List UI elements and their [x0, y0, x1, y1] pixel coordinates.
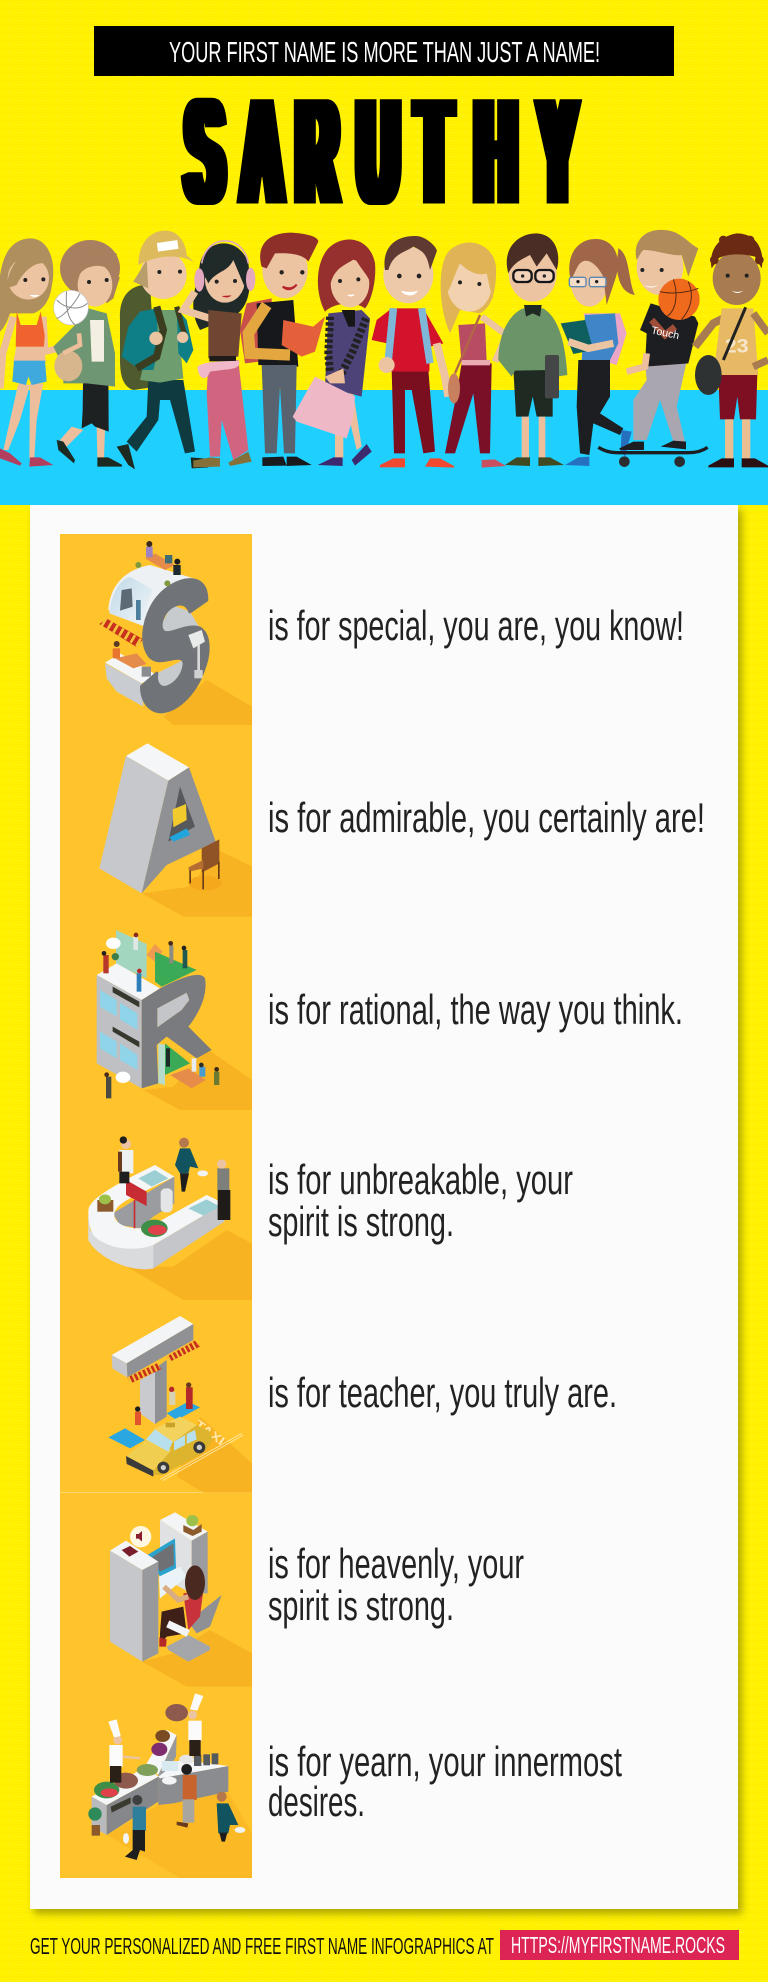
- illustration: isometric letter R: [97, 930, 252, 1110]
- character: boy on skateboard with basketball: [598, 230, 708, 467]
- taxi road marking: TAXI: [192, 1417, 227, 1448]
- waiter man right: [217, 1159, 230, 1220]
- illustration: isometric letter U: [88, 1136, 252, 1300]
- seated woman: [159, 1565, 205, 1647]
- wooden chair: [188, 839, 220, 889]
- customer in orange: [162, 1764, 197, 1828]
- chair: [167, 1595, 222, 1662]
- text: H lines: is for heavenly, your: [268, 1540, 524, 1587]
- group of students illustration, left half: [0, 231, 375, 469]
- potted plant: [88, 1807, 102, 1836]
- character: boy with glasses in green sweater: [498, 233, 567, 466]
- character: girl with red bob and pink case: [293, 239, 375, 466]
- staff woman left: [118, 1136, 133, 1183]
- rooftop desk workers: [135, 541, 181, 586]
- illustration: isometric letter S: [99, 541, 252, 725]
- character: boy on skateboard with basketball: Touch: [650, 325, 680, 342]
- text: U lines: spirit is strong.: [268, 1198, 454, 1245]
- people and desk around R: [102, 933, 219, 1098]
- text: Y lines: is for yearn, your innermost: [268, 1738, 622, 1785]
- character: girl with ponytail and tablet: [561, 239, 635, 466]
- character: girl in green jacket with volleyball: [53, 240, 122, 467]
- speech bubble with speaker: [130, 1526, 151, 1547]
- banner: tagline: [94, 26, 674, 76]
- cyan floor band: [0, 390, 768, 505]
- awnings: [127, 1341, 200, 1383]
- text: T line: is for teacher, you truly are.: [268, 1369, 617, 1416]
- R front face: [142, 975, 212, 1088]
- chef left: [108, 1719, 140, 1783]
- phone and plant: [122, 1515, 202, 1557]
- text: U lines: is for unbreakable, your: [268, 1156, 573, 1203]
- text: U lines: [268, 1156, 573, 1245]
- character: curly haired boy in jersey: 23: [725, 337, 749, 358]
- panel: orange letters column: [60, 534, 252, 1878]
- character: girl with pink headphones: [183, 241, 255, 467]
- character: girl in orange top: [0, 238, 78, 467]
- group of students illustration, right half: [372, 230, 768, 468]
- monitor and keyboard: [147, 1538, 187, 1598]
- customer woman in teal: [217, 1792, 245, 1842]
- food platters: [94, 1704, 218, 1798]
- building shell behind S: [108, 565, 197, 627]
- character: curly haired boy in jersey: [695, 233, 768, 467]
- striped awning: [99, 619, 143, 647]
- customer woman middle: [175, 1138, 208, 1192]
- red menu sign: [126, 1180, 147, 1228]
- lower terrace with desk: [105, 641, 157, 707]
- taxi road marking: [160, 1417, 243, 1481]
- text: Y lines: [268, 1738, 622, 1825]
- character: boy in red shirt: [372, 236, 454, 468]
- illustration: isometric letter H with desk: [110, 1512, 252, 1687]
- wall switch: [188, 630, 205, 678]
- panel: white content card: [30, 505, 742, 1914]
- text: H lines: spirit is strong.: [268, 1582, 454, 1629]
- text: H lines: [268, 1540, 524, 1629]
- illustration: isometric letter A: [99, 743, 252, 917]
- character: boy with yellow cap and backpack: [117, 231, 208, 469]
- S front face: [142, 580, 208, 712]
- illustration: isometric letter Y buffet: [88, 1693, 252, 1878]
- character: blonde girl: [441, 242, 507, 468]
- chef right: [188, 1693, 203, 1756]
- bin and plant: [97, 1188, 173, 1212]
- taxi: [126, 1417, 212, 1477]
- illustration: isometric letter T with taxi: [108, 1316, 252, 1493]
- speech bubbles: [106, 938, 130, 1083]
- text: Y lines: desires.: [268, 1778, 365, 1825]
- character: boy with red hair holding book: [240, 233, 325, 466]
- people sitting: [135, 1382, 193, 1425]
- watermelon tray: [141, 1220, 168, 1237]
- title: name: SARUTHY: [186, 68, 576, 235]
- customer in blue: [123, 1795, 146, 1860]
